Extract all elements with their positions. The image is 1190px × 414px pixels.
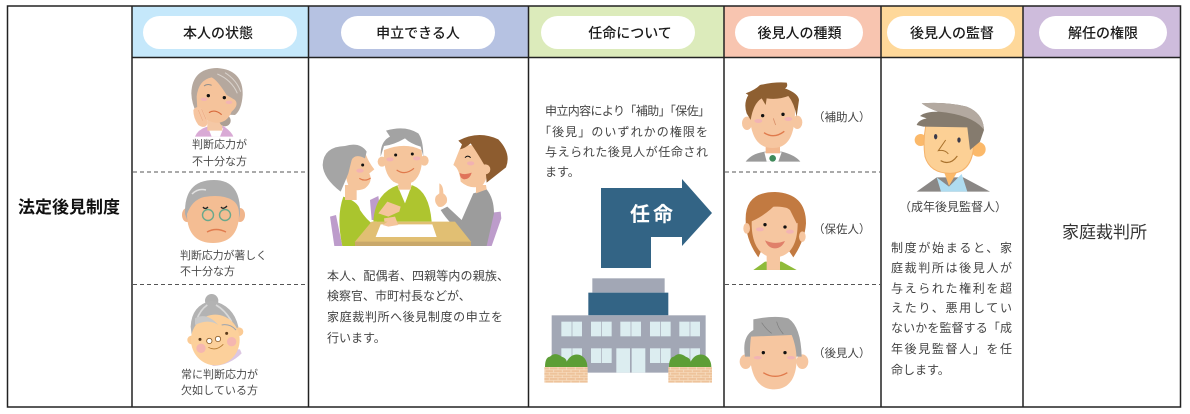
label: 成年後見監督人: （成年後見監督人） [899,199,1007,214]
panel: 本人の状態 [132,6,308,407]
icon: older man, 後見人 [740,317,808,389]
icon: grandfather with glasses [182,180,245,243]
text: 監督の説明: 制度が始まると、家 [891,240,1012,255]
icon: 家庭裁判所 building [544,278,712,383]
header pill: 本人の状態 [143,16,297,49]
label: 判断応力が著しく不十分な方 [180,248,267,278]
text: 監督の説明 [891,240,1012,377]
arrow: 任命: 任命 [630,203,676,226]
label: 判断応力が著しく不十分な方: 判断応力が著しく [180,248,267,262]
text: 任命の説明: ます。 [545,165,580,179]
header pill: 後見人の監督 [887,16,1015,49]
text: 監督の説明: えたり、悪用してい [891,301,1012,315]
label: 判断応力が不十分な方 [192,137,247,168]
header pill: 後見人の種類 [735,16,863,49]
panel: 解任の権限 [1023,6,1181,407]
text: 申立できる人の説明: 本人、配偶者、四親等内の親族、 [327,269,509,283]
header pill: 本人の状態: 本人の状態 [183,25,253,41]
panel: 後見人の監督 [881,6,1023,407]
panel: 任命について [529,6,724,407]
icon: smiling grandmother with bun [187,294,243,366]
table [355,222,471,246]
panel: 後見人の種類 [724,6,881,407]
header pill: 後見人の種類: 後見人の種類 [758,25,842,41]
label: 常に判断応力が欠如している方: 常に判断応力が [181,367,258,381]
text: 監督の説明: 命します。 [891,362,950,377]
text: 監督の説明: 庭裁判所は後見人が [891,260,1012,275]
icon: woman, 保佐人 [743,192,806,270]
label: 保佐人: （保佐人） [813,222,870,236]
label: 常に判断応力が欠如している方 [181,367,258,397]
text: 任命の説明 [539,104,710,179]
text: 監督の説明: 与えられた権利を超 [891,280,1012,296]
icon: 成年後見監督人 man [915,103,990,192]
text: 監督の説明: ないかを監督する「成 [891,320,1012,335]
old woman [339,197,388,246]
arrow: 任命 [601,179,712,268]
heading: 法定後見制度: 法定後見制度 [18,197,120,217]
text: 任命の説明: 与えられた後見人が任命され [545,144,708,159]
header pill: 任命について: 任命について [588,25,672,41]
header pill: 任命について [541,16,695,49]
text: 申立できる人の説明: 検察官、市町村長などが、 [327,288,471,303]
header pill: 解任の権限: 解任の権限 [1068,25,1138,41]
label: 常に判断応力が欠如している方: 欠如している方 [181,383,258,397]
text: 申立できる人の説明 [327,269,509,345]
icon: man, 補助人 [742,82,802,162]
label: 補助人: （補助人） [813,110,870,124]
old man [373,185,432,222]
text: 任命の説明: 「後見」のいずれかの権限を [539,124,708,139]
header pill: 申立できる人 [341,16,495,49]
young man [441,189,494,246]
panel: row title [8,6,132,407]
text: 任命の説明: 申立内容により「補助」「保佐」 [545,104,710,118]
label: 判断応力が著しく不十分な方: 不十分な方 [180,264,235,278]
header pill: 申立できる人: 申立できる人 [376,25,460,41]
label: 後見人: （後見人） [813,346,870,360]
text: 申立できる人の説明: 家庭裁判所へ後見制度の申立を [327,310,503,324]
header pill: 後見人の監督: 後見人の監督 [910,25,994,41]
illustration: family consulting at a table [323,128,508,246]
text: 家庭裁判所: 家庭裁判所 [1062,223,1147,242]
icon: worried grandmother [191,68,243,137]
label: 判断応力が不十分な方: 判断応力が [192,137,247,151]
text: 申立できる人の説明: 行います。 [327,331,386,345]
header pill: 解任の権限 [1039,16,1167,49]
text: 監督の説明: 年後見監督人」を任 [891,341,1012,356]
label: 判断応力が不十分な方: 不十分な方 [192,154,247,168]
panel: 申立できる人 [308,6,529,407]
